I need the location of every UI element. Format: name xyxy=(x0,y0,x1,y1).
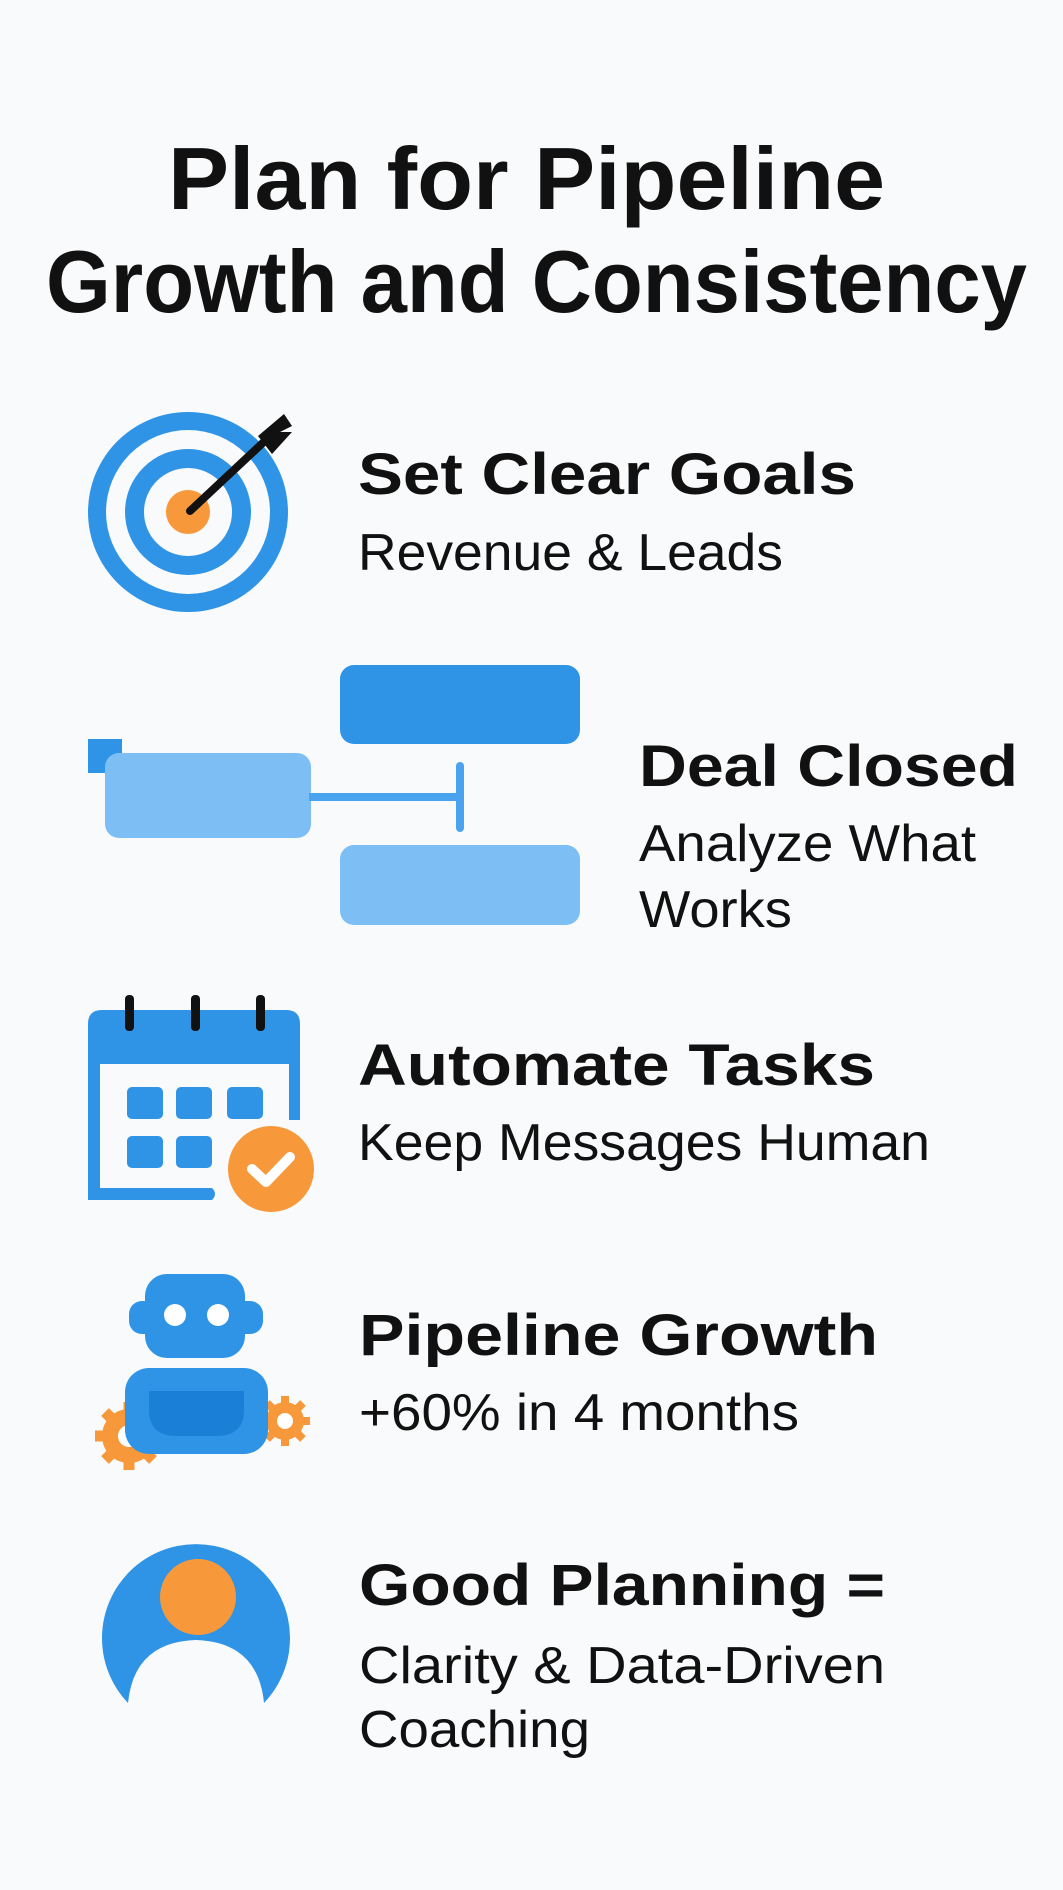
icon: flowchart xyxy=(88,665,580,925)
heading: automate tasks xyxy=(358,1033,930,1172)
icon: target xyxy=(88,412,292,612)
icon: person xyxy=(102,1544,290,1703)
heading: deal closed: Deal Closed xyxy=(639,734,1018,799)
heading: pipeline growth: Pipeline Growth xyxy=(359,1303,878,1368)
title: Growth and Consistency xyxy=(46,232,1027,331)
title xyxy=(46,129,1027,331)
heading: deal closed: Works xyxy=(639,881,792,939)
title: Plan for Pipeline xyxy=(168,129,885,228)
heading: automate tasks: Keep Messages Human xyxy=(358,1114,930,1172)
heading: set clear goals xyxy=(358,442,856,582)
heading: pipeline growth: +60% in 4 months xyxy=(359,1384,799,1442)
heading: set clear goals: Set Clear Goals xyxy=(358,442,856,507)
icon: robot with gears xyxy=(95,1274,310,1470)
heading: deal closed: Analyze What xyxy=(639,815,977,873)
heading: good planning: Good Planning = xyxy=(359,1553,885,1618)
heading: deal closed xyxy=(639,734,1018,939)
heading: pipeline growth xyxy=(359,1303,878,1442)
heading: automate tasks: Automate Tasks xyxy=(358,1033,875,1098)
icon: calendar with check xyxy=(88,995,319,1217)
heading: good planning: Clarity & Data-Driven xyxy=(359,1637,885,1695)
heading: good planning xyxy=(359,1553,885,1759)
heading: set clear goals: Revenue & Leads xyxy=(358,524,783,582)
heading: good planning: Coaching xyxy=(359,1701,590,1759)
